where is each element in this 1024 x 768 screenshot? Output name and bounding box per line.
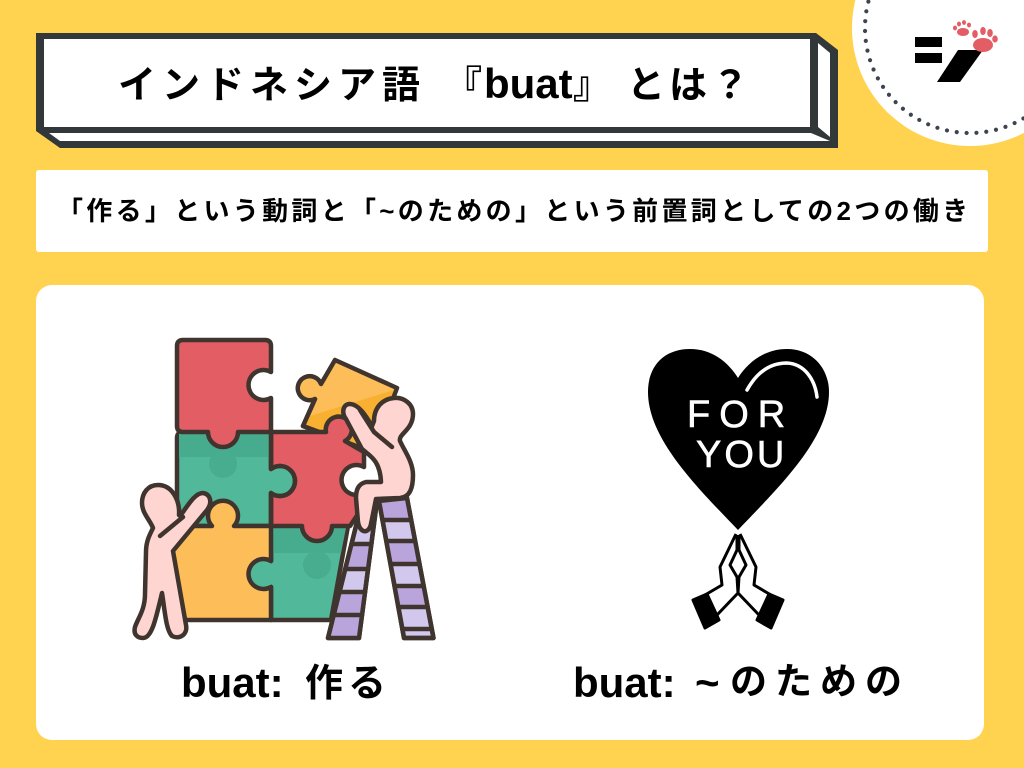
label: buat make: buat: — [181, 659, 284, 706]
praying hands — [693, 534, 783, 628]
person right on ladder — [343, 398, 413, 531]
title: 『 — [444, 65, 482, 107]
title — [118, 60, 749, 107]
heart text for: FOR — [687, 394, 794, 436]
right ladder — [379, 498, 434, 638]
left green piece — [177, 432, 295, 526]
main panel — [36, 285, 984, 740]
subtitle text: 「作る」という動詞と「~のための」という前置詞としての2つの働き — [57, 196, 971, 226]
label: buat for: のための — [730, 661, 910, 702]
label: buat make — [181, 659, 391, 706]
heart — [648, 349, 829, 530]
left ladder — [328, 501, 377, 638]
top red piece — [177, 340, 271, 447]
title box — [36, 33, 838, 148]
icon: heart with praying hands — [648, 349, 829, 628]
logo badge — [852, 0, 1024, 146]
right green piece — [249, 526, 348, 620]
arm line right person — [360, 410, 392, 447]
label: buat make: 作る — [305, 663, 391, 705]
label: buat for: buat: — [573, 659, 676, 706]
heart highlight — [747, 363, 817, 397]
title: インドネシア語 — [118, 65, 426, 107]
title: buat — [484, 60, 573, 107]
heart text you: YOU — [696, 434, 787, 476]
arm line left person — [160, 517, 183, 536]
title: ？ — [711, 65, 749, 107]
bottom yellow piece — [172, 501, 271, 620]
title: 』 — [573, 65, 611, 107]
flying yellow puzzle piece — [298, 360, 397, 446]
title: とは — [627, 65, 711, 107]
person left — [135, 485, 210, 638]
green tab over yellow piece — [249, 559, 271, 589]
subtitle panel — [36, 170, 988, 252]
label: buat for: ~ — [695, 659, 720, 706]
centre red piece — [271, 417, 364, 541]
label: buat for — [573, 659, 910, 706]
illustration: puzzle with people — [135, 340, 434, 638]
